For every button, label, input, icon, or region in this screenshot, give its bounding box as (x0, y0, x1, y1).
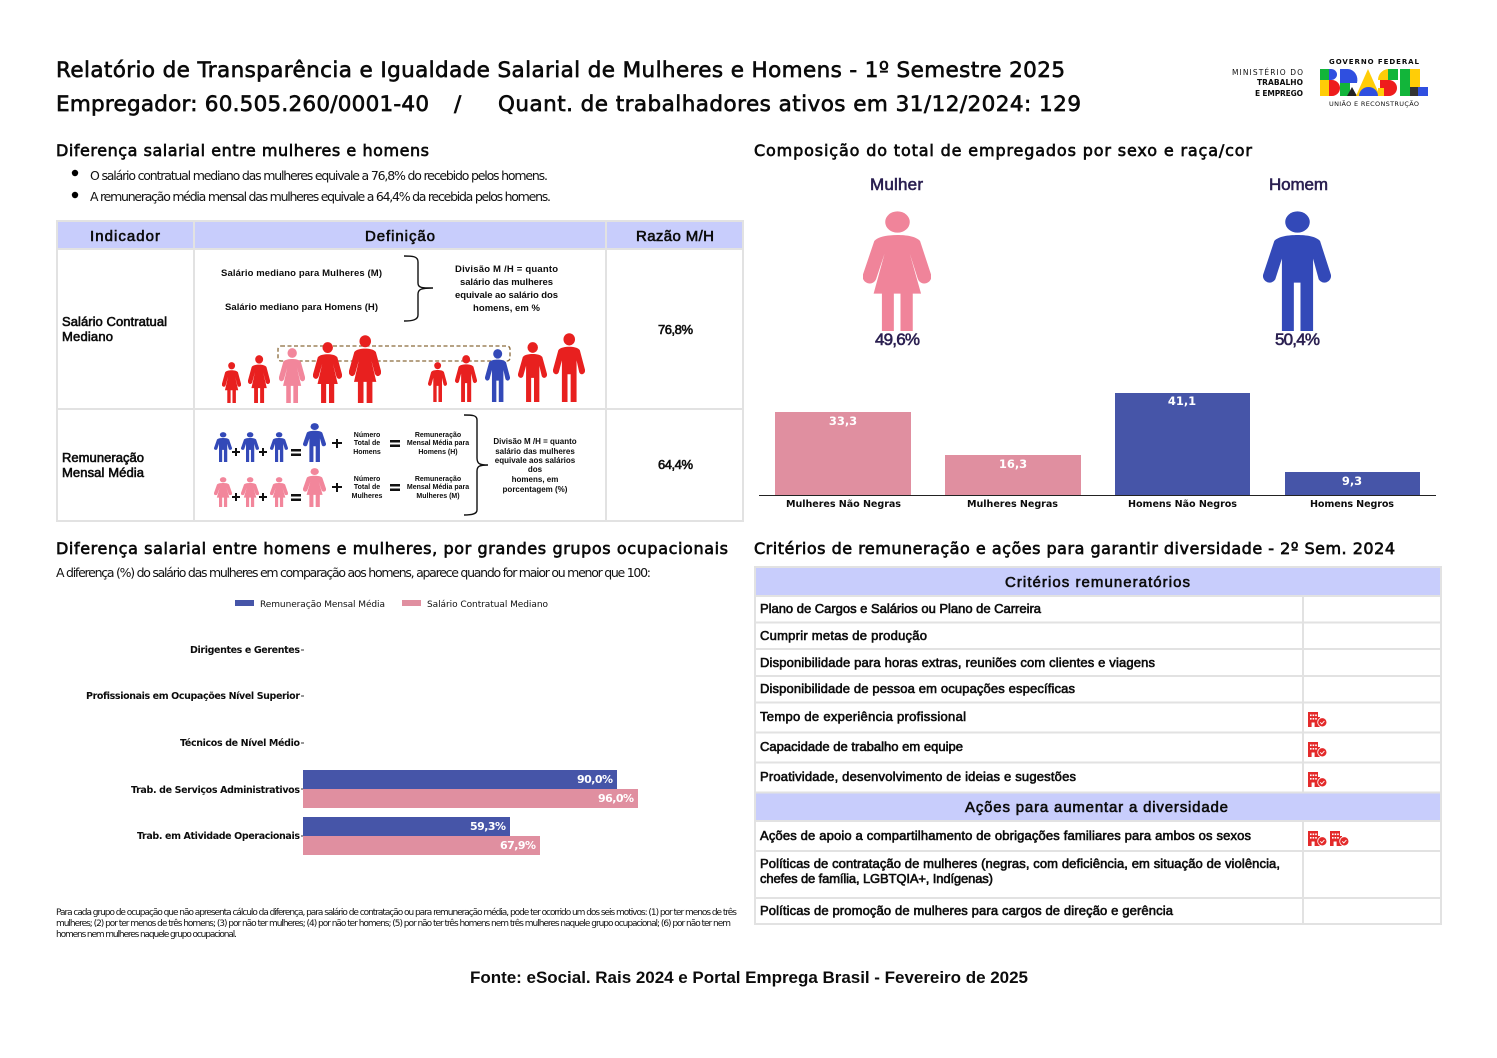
logo: Governo Federal Brasil (1320, 58, 1428, 108)
icon: man (1263, 211, 1331, 331)
title: Quant. de trabalhadores ativos em 31/12/2024: 129 (498, 92, 1081, 117)
definition: average pay diagram: Remuneração (415, 476, 461, 483)
definition: median salary diagram (221, 256, 585, 403)
logo: Governo Federal Brasil: UNIÃO E RECONSTRUÇÃO (1329, 99, 1419, 108)
panel: criteria table: chefes de família, LGBTQIA+, Indígenas) (760, 871, 993, 886)
panel: criteria table: Políticas de promoção de mulheres para cargos de direção e gerência (760, 903, 1174, 918)
value: 64,4%: 64,4% (658, 457, 693, 472)
text block: key findings: A remuneração média mensal das mulheres equivale a 64,4% da recebida pelos homens. (90, 189, 551, 204)
panel: criteria table: Capacidade de trabalho em equipe (760, 739, 963, 754)
bar chart: occupational groups: 96,0% (598, 792, 634, 805)
bar chart: occupational groups: 90,0% (577, 773, 613, 786)
section header: Critérios remuneratórios: Critérios remuneratórios (1005, 574, 1190, 591)
row label: Salário Contratual Mediano: Salário Contratual (62, 314, 167, 329)
panel: woman share: 49,6% (875, 330, 920, 349)
definition: median salary diagram: Salário mediano para Homens (H) (225, 302, 378, 313)
panel: woman share (863, 175, 931, 349)
icon: woman (863, 211, 931, 331)
footnote: Para cada grupo de ocupação que não apresenta cálculo da diferença, para salário de contratação ou para remuneração média, pode ter ocorrido um dos seis motivos: (1) por ter menos de três (56, 907, 737, 918)
title (56, 58, 1081, 117)
source note: Fonte: eSocial. Rais 2024 e Portal Emprega Brasil - Fevereiro de 2025 (470, 968, 1028, 987)
panel: man share: 50,4% (1275, 330, 1320, 349)
panel: man share (1263, 175, 1331, 349)
logo: Ministério do Trabalho e Emprego: TRABALHO (1257, 78, 1303, 87)
definition: average pay diagram: Mensal Média para (407, 484, 469, 491)
definition: median salary diagram: Divisão M /H = quanto (455, 264, 558, 275)
panel: criteria table: Disponibilidade de pessoa em ocupações específicas (760, 681, 1076, 696)
definition: average pay diagram: Remuneração (415, 432, 461, 439)
definition: average pay diagram: Total de (354, 484, 380, 491)
row label: Remuneração Mensal Média (62, 450, 145, 480)
bar chart: workforce composition: Homens Negros (1310, 499, 1394, 510)
definition: average pay diagram (214, 415, 577, 515)
text block: key findings (72, 168, 551, 204)
row label: Remuneração Mensal Média: Remuneração (62, 450, 144, 465)
heading: Diferença salarial por grandes grupos: Diferença salarial entre homens e mulheres, por grandes grupos ocupacionais (56, 539, 728, 558)
legend: Remuneração Mensal Média (260, 599, 385, 610)
panel: criteria table: Proatividade, desenvolvimento de ideias e sugestões (760, 769, 1076, 784)
text block: key findings: O salário contratual mediano das mulheres equivale a 76,8% do recebido pelos homens. (90, 168, 548, 183)
footnote (56, 907, 737, 940)
title: / (454, 92, 462, 117)
table header: Razão M/H (636, 228, 714, 245)
definition: average pay diagram: Divisão M /H = quanto (493, 437, 577, 446)
bar chart: occupational groups (86, 645, 638, 855)
panel: indicator table (56, 221, 744, 521)
panel: criteria table (754, 566, 1442, 925)
panel: criteria table: Cumprir metas de produção (760, 628, 927, 643)
definition: average pay diagram: Mulheres (352, 493, 382, 500)
footnote: homens nem mulheres naquele grupo ocupacional. (56, 930, 237, 940)
logo: Ministério do Trabalho e Emprego: E EMPREGO (1255, 89, 1303, 98)
bar chart: workforce composition: 33,3 (829, 414, 857, 428)
definition: average pay diagram: Mulheres (M) (416, 493, 460, 500)
bar chart: occupational groups: Técnicos de Nível Médio (180, 738, 300, 749)
definition: average pay diagram: salário das mulheres (495, 447, 575, 456)
heading: Composição do total de empregados: Composição do total de empregados por sexo e raça/cor (754, 141, 1252, 160)
definition: average pay diagram: Homens (H) (418, 449, 458, 456)
bar chart: occupational groups: 67,9% (500, 839, 536, 852)
title: Empregador: 60.505.260/0001-40 (56, 92, 429, 117)
footnote: mulheres; (2) por ter menos de três homens; (3) por não ter mulheres; (4) por não ter homens; (5) por não ter três homens nem três mulheres naquele grupo ocupacional; (6) por não ter nem (56, 918, 731, 929)
section header: Ações para aumentar a diversidade: Ações para aumentar a diversidade (965, 799, 1228, 816)
panel: criteria table: Disponibilidade para horas extras, reuniões com clientes e viagens (760, 655, 1156, 670)
text block: chart description: A diferença (%) do salário das mulheres em comparação aos homens, aparece quando for maior ou menor que 100: (56, 565, 651, 580)
definition: average pay diagram: Número (354, 432, 380, 439)
panel: criteria table: Tempo de experiência profissional (760, 709, 966, 724)
legend (235, 599, 548, 610)
definition: median salary diagram: salário das mulheres (460, 277, 553, 288)
definition: average pay diagram: Mensal Média para (407, 440, 469, 447)
panel: criteria table: Políticas de contratação de mulheres (negras, com deficiência, em situação de violência, (760, 856, 1280, 871)
bar chart: occupational groups: Profissionais em Ocupações Nível Superior (86, 691, 300, 702)
definition: median salary diagram: equivale ao salário dos (455, 290, 558, 301)
value: 76,8%: 76,8% (658, 322, 693, 337)
definition: average pay diagram: porcentagem (%) (503, 485, 568, 494)
table header (56, 221, 743, 249)
bar chart: workforce composition: 16,3 (999, 457, 1027, 471)
bar chart: workforce composition: Homens Não Negros (1128, 499, 1237, 510)
bar chart: occupational groups: Trab. de Serviços Administrativos (131, 785, 300, 796)
legend: Salário Contratual Mediano (427, 600, 548, 610)
panel: man share: Homem (1269, 175, 1328, 194)
title: Relatório de Transparência e Igualdade Salarial de Mulheres e Homens - 1º Semestre 2025 (56, 58, 1065, 83)
definition: average pay diagram: Total de (354, 440, 380, 447)
definition: average pay diagram: dos (528, 465, 543, 474)
definition: median salary diagram: Salário mediano para Mulheres (M) (221, 268, 382, 279)
panel: criteria table: Ações de apoio a compartilhamento de obrigações familiares para ambos os sexos (760, 828, 1252, 843)
definition: average pay diagram: Homens (353, 449, 381, 456)
heading: Critérios de remuneração e ações: Critérios de remuneração e ações para garantir diversidade - 2º Sem. 2024 (754, 539, 1395, 558)
table header: Definição (365, 228, 435, 245)
definition: average pay diagram: Número (354, 476, 380, 483)
bar chart: workforce composition: Mulheres Negras (967, 499, 1058, 510)
definition: median salary diagram: homens, em % (473, 303, 541, 314)
bar chart: workforce composition (759, 393, 1436, 510)
bar chart: occupational groups: Dirigentes e Gerentes (190, 645, 300, 656)
definition: average pay diagram: equivale aos salários (495, 456, 576, 465)
bar chart: workforce composition: Mulheres Não Negras (786, 499, 901, 510)
bar chart: workforce composition: 41,1 (1168, 394, 1196, 408)
bar chart: occupational groups: Trab. em Atividade Operacionais (137, 831, 300, 842)
logo: Ministério do Trabalho e Emprego: MINISTÉRIO DO (1232, 68, 1303, 77)
panel: criteria table: Plano de Cargos e Salários ou Plano de Carreira (760, 601, 1042, 616)
table header: Indicador (90, 228, 160, 245)
bar chart: workforce composition: 9,3 (1342, 474, 1362, 488)
heading: Diferença salarial entre mulheres e homens: Diferença salarial entre mulheres e homens (56, 141, 429, 160)
row label: Remuneração Mensal Média: Mensal Média (62, 465, 145, 480)
logo: Ministério do Trabalho e Emprego (1232, 68, 1303, 98)
logo: Governo Federal Brasil: GOVERNO FEDERAL (1329, 58, 1420, 66)
definition: average pay diagram: homens, em (512, 475, 558, 484)
bar chart: occupational groups: 59,3% (470, 820, 506, 833)
row label: Salário Contratual Mediano: Mediano (62, 329, 113, 344)
row label: Salário Contratual Mediano (62, 314, 167, 344)
panel: woman share: Mulher (870, 175, 923, 194)
icons: company markers (1308, 712, 1349, 846)
